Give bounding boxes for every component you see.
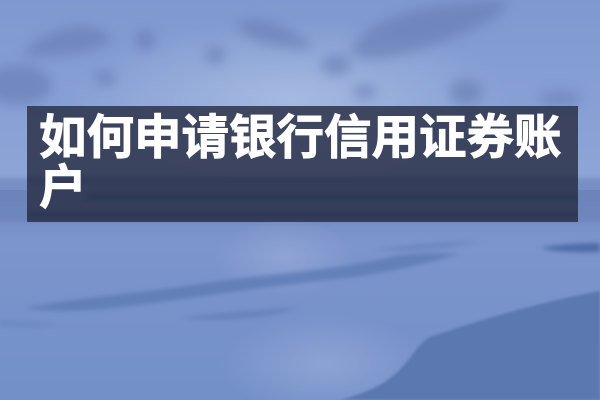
title panel bbox=[27, 106, 578, 222]
sky bbox=[0, 0, 600, 200]
title: 如何申请银行信用证券账户 bbox=[39, 112, 562, 215]
sand beach bbox=[340, 291, 600, 400]
waves bbox=[0, 242, 600, 328]
sea bbox=[0, 178, 600, 400]
